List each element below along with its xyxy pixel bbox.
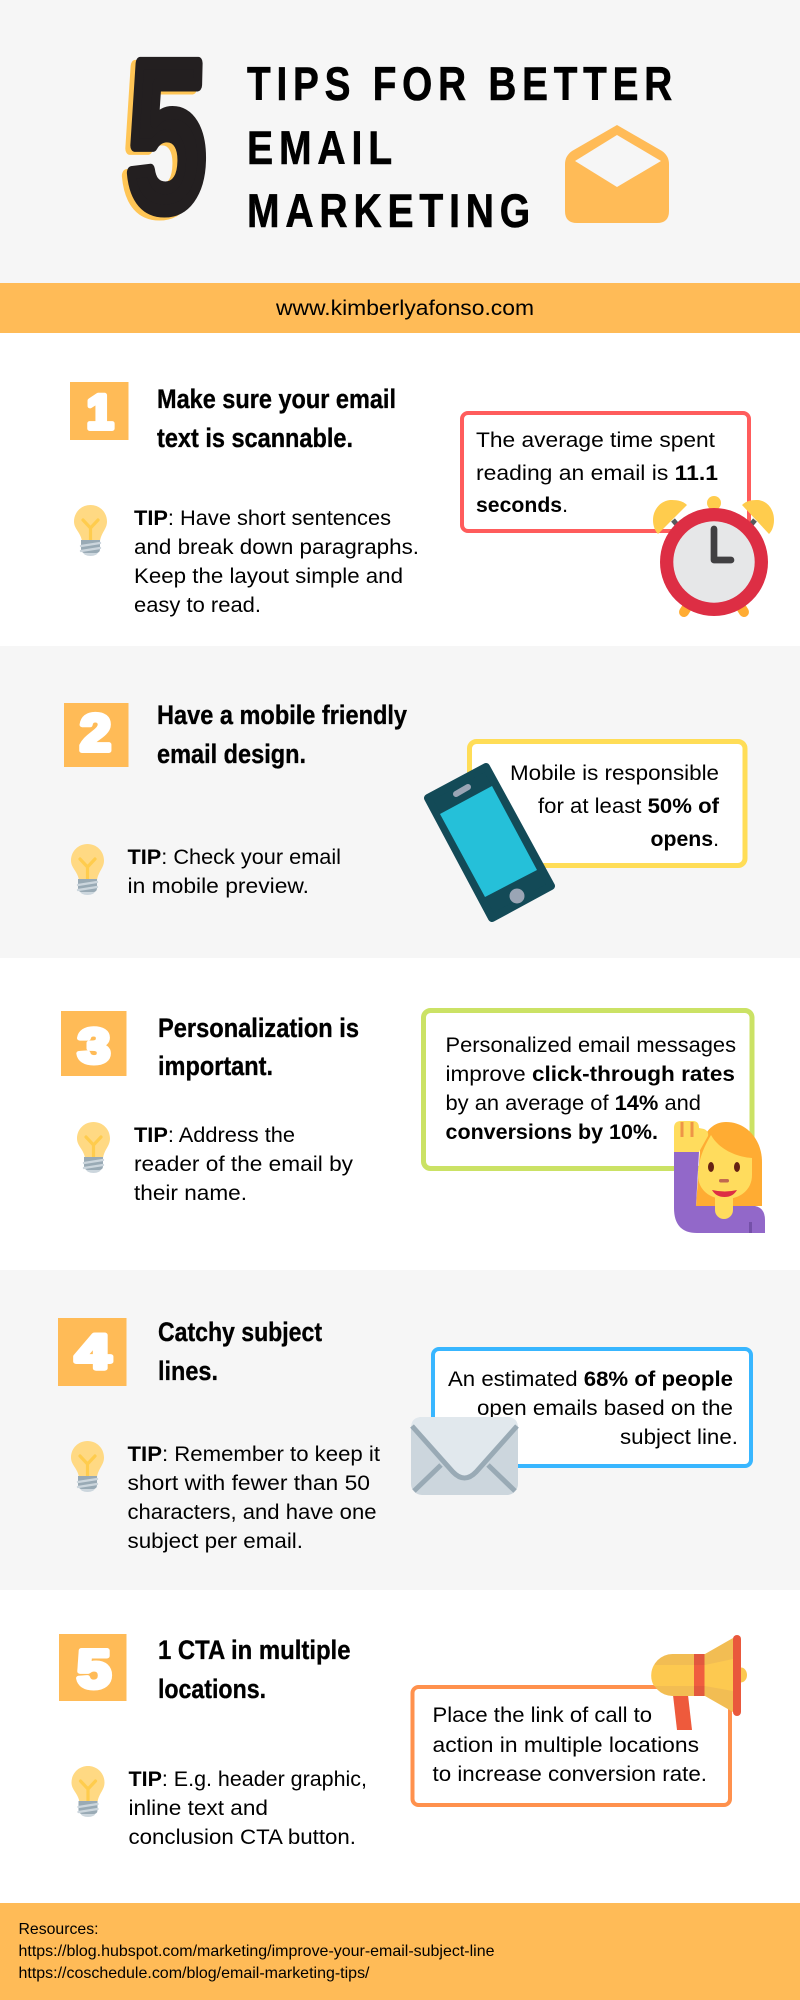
panel: tip 2	[0, 646, 800, 958]
callout: click-through rates: Personalized email messages	[446, 1034, 736, 1057]
tip text: and break down paragraphs.	[134, 536, 419, 559]
website band: www.kimberlyafonso.com	[275, 297, 534, 320]
website band	[0, 283, 800, 333]
icon: envelope	[411, 1417, 518, 1495]
callout: 11.1 seconds: seconds.	[476, 494, 568, 517]
callout: multiple locations: Place the link of call to	[432, 1704, 652, 1727]
tip text: their name.	[134, 1182, 247, 1205]
heading: Have a mobile friendly	[157, 700, 407, 730]
callout: 68% of people: An estimated 68% of people	[448, 1368, 733, 1391]
heading	[157, 384, 396, 453]
icon: light bulb	[71, 844, 104, 895]
callout: 68% of people	[433, 1349, 751, 1466]
big number 5: 5	[120, 21, 204, 258]
icon: light bulb	[71, 1441, 104, 1492]
heading	[157, 700, 407, 769]
heading	[158, 1317, 322, 1386]
tip text: subject per email.	[128, 1530, 303, 1553]
tip text: TIP: Have short sentences	[134, 507, 391, 530]
number badge 3	[61, 1011, 126, 1076]
tip text: short with fewer than 50	[128, 1472, 370, 1495]
tip text: reader of the email by	[134, 1153, 354, 1176]
footer: resources: https://coschedule.com/blog/email-marketing-tips/	[18, 1965, 370, 1982]
callout: multiple locations: to increase conversion rate.	[432, 1763, 707, 1786]
panel: tip 5	[0, 1590, 800, 1903]
heading: Catchy subject	[158, 1317, 322, 1347]
tip text: TIP: Check your email	[128, 846, 341, 869]
heading: text is scannable.	[157, 423, 353, 453]
number badge 1	[70, 382, 128, 440]
number badge 4: 4	[76, 1326, 111, 1380]
tip text: characters, and have one	[128, 1501, 376, 1524]
heading: Personalization is	[158, 1013, 359, 1043]
tip text: Keep the layout simple and	[134, 565, 403, 588]
icon: alarm clock	[653, 496, 774, 616]
heading: important.	[158, 1051, 273, 1081]
tip text	[134, 507, 419, 617]
tip text: TIP: E.g. header graphic,	[128, 1768, 367, 1791]
tip text	[128, 846, 341, 898]
number badge 1: 1	[87, 386, 113, 440]
callout: 68% of people: open emails based on the	[477, 1397, 733, 1420]
heading: lines.	[158, 1356, 218, 1386]
tip text: inline text and	[128, 1797, 268, 1820]
callout: 50% of opens: for at least 50% of	[538, 795, 720, 818]
callout: click-through rates: improve click-through rates	[446, 1063, 735, 1086]
panel: tip 1	[0, 333, 800, 646]
footer: resources	[0, 1903, 800, 2000]
callout: 50% of opens: Mobile is responsible	[510, 762, 719, 785]
title: MARKETING	[247, 184, 536, 237]
number badge 5	[59, 1634, 126, 1701]
callout: 68% of people: subject line.	[620, 1426, 738, 1449]
heading	[158, 1013, 359, 1081]
tip text	[134, 1124, 354, 1205]
callout: 50% of opens	[470, 742, 745, 866]
tip text: TIP: Remember to keep it	[128, 1443, 380, 1466]
footer: resources: https://blog.hubspot.com/marketing/improve-your-email-subject-line	[18, 1943, 495, 1960]
icon: open envelope	[565, 125, 669, 223]
tip text: in mobile preview.	[128, 875, 309, 898]
tip text	[128, 1443, 380, 1553]
icon: megaphone	[651, 1635, 747, 1730]
number badge 2: 2	[80, 704, 111, 762]
icon: light bulb	[77, 1122, 110, 1173]
header panel	[0, 0, 800, 283]
icon: light bulb	[74, 505, 107, 556]
callout: multiple locations	[412, 1687, 730, 1805]
callout: multiple locations: action in multiple locations	[432, 1734, 699, 1757]
callout: 11.1 seconds	[462, 413, 749, 531]
heading: locations.	[158, 1674, 266, 1704]
icon: light bulb	[72, 1766, 104, 1817]
callout: 11.1 seconds: The average time spent	[476, 429, 715, 452]
callout: click-through rates: by an average of 14% and	[446, 1092, 701, 1115]
icon: woman raising hand	[674, 1121, 765, 1233]
title: TIPS FOR BETTER	[247, 57, 678, 110]
big number 5: 5	[125, 18, 209, 255]
icon: mobile phone	[428, 767, 551, 918]
number badge 4	[58, 1318, 126, 1386]
footer: resources: Resources:	[18, 1921, 98, 1938]
heading: Make sure your email	[157, 384, 396, 414]
tip text: TIP: Address the	[134, 1124, 295, 1147]
tip text: easy to read.	[134, 594, 261, 617]
number badge 3: 3	[78, 1020, 110, 1074]
title	[247, 57, 678, 237]
callout: 11.1 seconds: reading an email is 11.1	[476, 462, 718, 485]
number badge 5: 5	[77, 1640, 111, 1700]
callout: 50% of opens: opens.	[650, 828, 719, 851]
callout: click-through rates	[424, 1010, 752, 1168]
number badge 2	[64, 703, 128, 767]
panel: tip 4	[0, 1270, 800, 1590]
heading: 1 CTA in multiple	[158, 1635, 350, 1665]
title: EMAIL	[247, 121, 398, 174]
tip text: conclusion CTA button.	[128, 1826, 356, 1849]
callout: click-through rates: conversions by 10%.	[446, 1121, 658, 1144]
heading	[158, 1635, 350, 1704]
panel: tip 3	[0, 958, 800, 1270]
tip text	[128, 1768, 367, 1849]
heading: email design.	[157, 739, 306, 769]
